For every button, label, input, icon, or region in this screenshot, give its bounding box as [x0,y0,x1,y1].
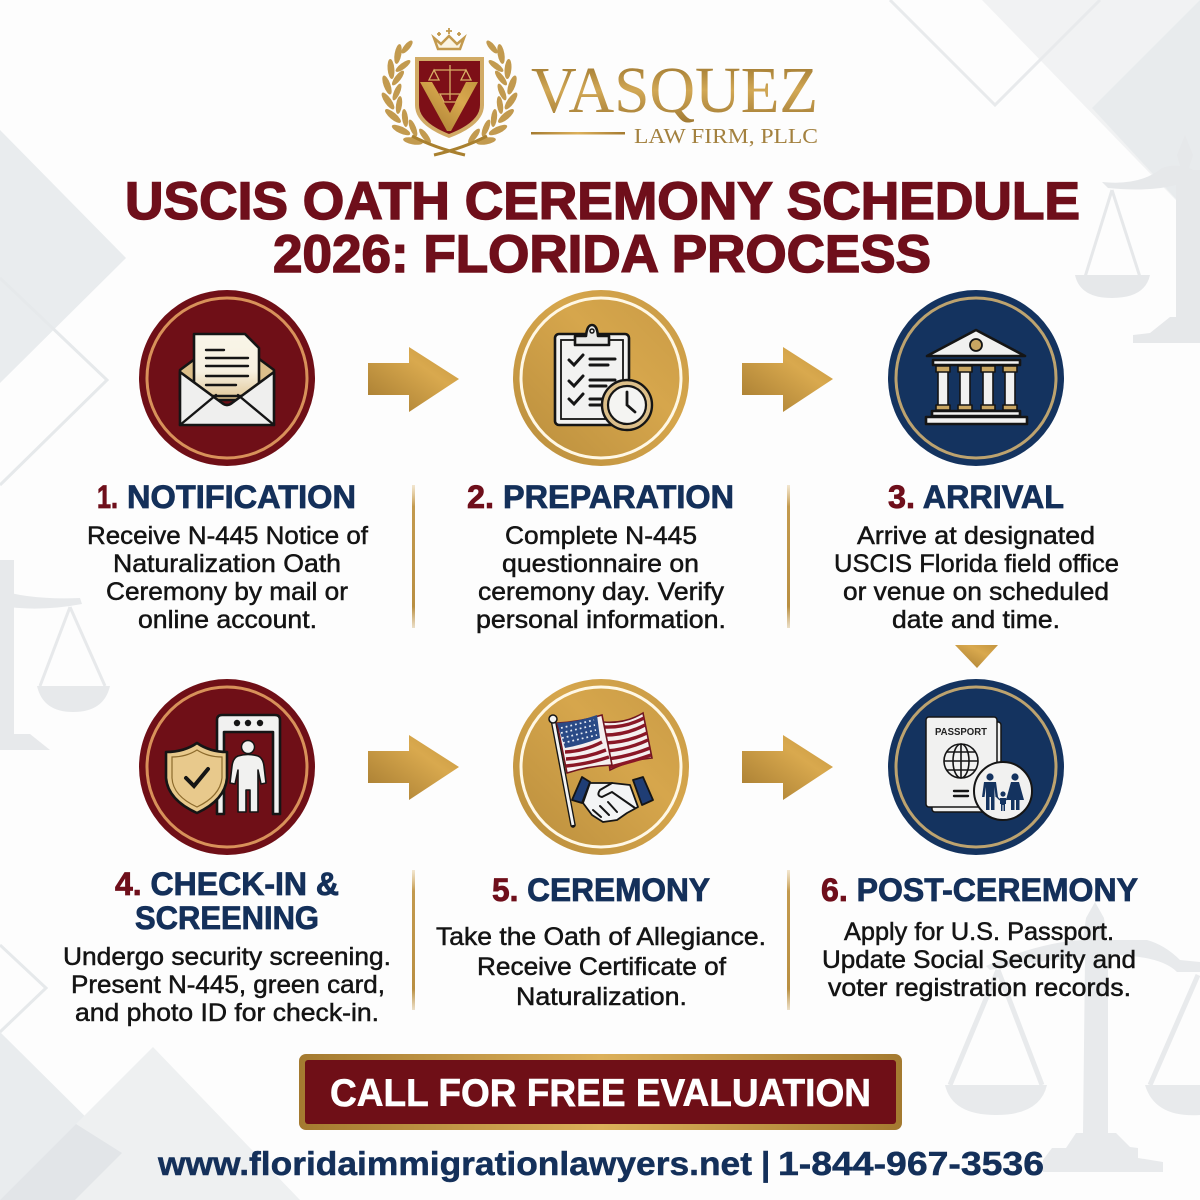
family figures [982,773,1024,811]
step 4 text [63,866,391,1027]
step 1 text: Naturalization Oath [113,550,341,578]
step 6 text: 6. POST-CEREMONY [821,872,1138,908]
title: 2026: FLORIDA PROCESS [273,225,931,284]
logo laurel right [434,39,520,155]
footer contact line: 1-844-967-3536 [778,1145,1044,1182]
arrow 5 to 6 [742,735,833,800]
step 6 icon: passport and family: PASSPORT [935,726,988,738]
step 3 text: or venue on scheduled [843,578,1109,606]
step 5 icon: flag and handshake [513,679,689,855]
step 5 text: Take the Oath of Allegiance. [436,923,766,951]
arrow 2 to 3 [742,347,833,412]
call to action button [299,1054,902,1130]
footer contact line: www.floridaimmigrationlawyers.net [157,1145,752,1182]
step 1 text: Ceremony by mail or [106,578,348,606]
step 5 text [436,872,766,1011]
logo crown [434,28,464,49]
step 3 text: 3. ARRIVAL [888,479,1064,515]
step 6 text: Update Social Security and [822,946,1136,974]
step 2 text: questionnaire on [502,550,699,578]
divider [787,485,790,628]
step 4 text: Present N-445, green card, [71,971,385,999]
logo rule [531,132,625,134]
background: scales of justice, lower right [945,902,1200,1172]
step 1 text: Receive N-445 Notice of [87,522,368,550]
arrow 4 to 5 [368,735,459,800]
step 3 text: date and time. [892,606,1060,634]
step 6 text: voter registration records. [828,974,1131,1002]
logo wordmark: VASQUEZ [531,54,818,127]
background: scales of justice, upper right [1075,135,1200,343]
arrow 1 to 2 [368,347,459,412]
logo laurel left [379,39,465,155]
step 2 text: Complete N-445 [505,522,697,550]
step 4 icon: security screening [139,679,315,855]
handshake [572,777,653,822]
step 4 text: Undergo security screening. [63,943,391,971]
step 2 text [467,479,734,634]
step 4 text: 4. CHECK-IN & [115,866,339,902]
step 6 text [821,872,1138,1002]
step 3 text: Arrive at designated [857,522,1095,550]
step 1 text: 1. [97,479,118,515]
divider [412,485,415,628]
footer contact line [157,1145,1044,1182]
background: scales of justice, left [0,560,110,750]
step 3 text [834,479,1119,634]
step 1 text [87,479,368,634]
step 6 icon: passport and family [888,679,1064,855]
step 4 text: SCREENING [135,900,319,936]
step 5 text: Naturalization. [516,983,687,1011]
logo subline: LAW FIRM, PLLC [634,124,818,148]
step 5 text: Receive Certificate of [477,953,726,981]
divider [787,870,790,1010]
logo: Vasquez Law Firm [379,28,818,155]
step 6 text: Apply for U.S. Passport. [844,918,1114,946]
step 3 icon: courthouse [888,290,1064,466]
step 3 text: USCIS Florida field office [834,550,1119,578]
step 1 icon: envelope [139,290,315,466]
step 5 text: 5. CEREMONY [492,872,710,908]
title [125,172,1080,284]
step 2 text: ceremony day. Verify [478,578,725,606]
step 2 icon: clipboard and clock [513,290,689,466]
step 1 text: online account. [138,606,317,634]
step 4 text: and photo ID for check-in. [75,999,379,1027]
footer contact line: | [761,1145,770,1182]
call to action button: CALL FOR FREE EVALUATION [330,1072,871,1115]
title: USCIS OATH CEREMONY SCHEDULE [125,172,1080,231]
down arrow 3 to 6 [955,645,998,668]
step 1 text: NOTIFICATION [127,479,356,515]
flag [557,713,652,773]
divider [412,870,415,1010]
logo shield [415,57,484,138]
step 2 text: personal information. [476,606,726,634]
step 2 text: 2. PREPARATION [467,479,734,515]
